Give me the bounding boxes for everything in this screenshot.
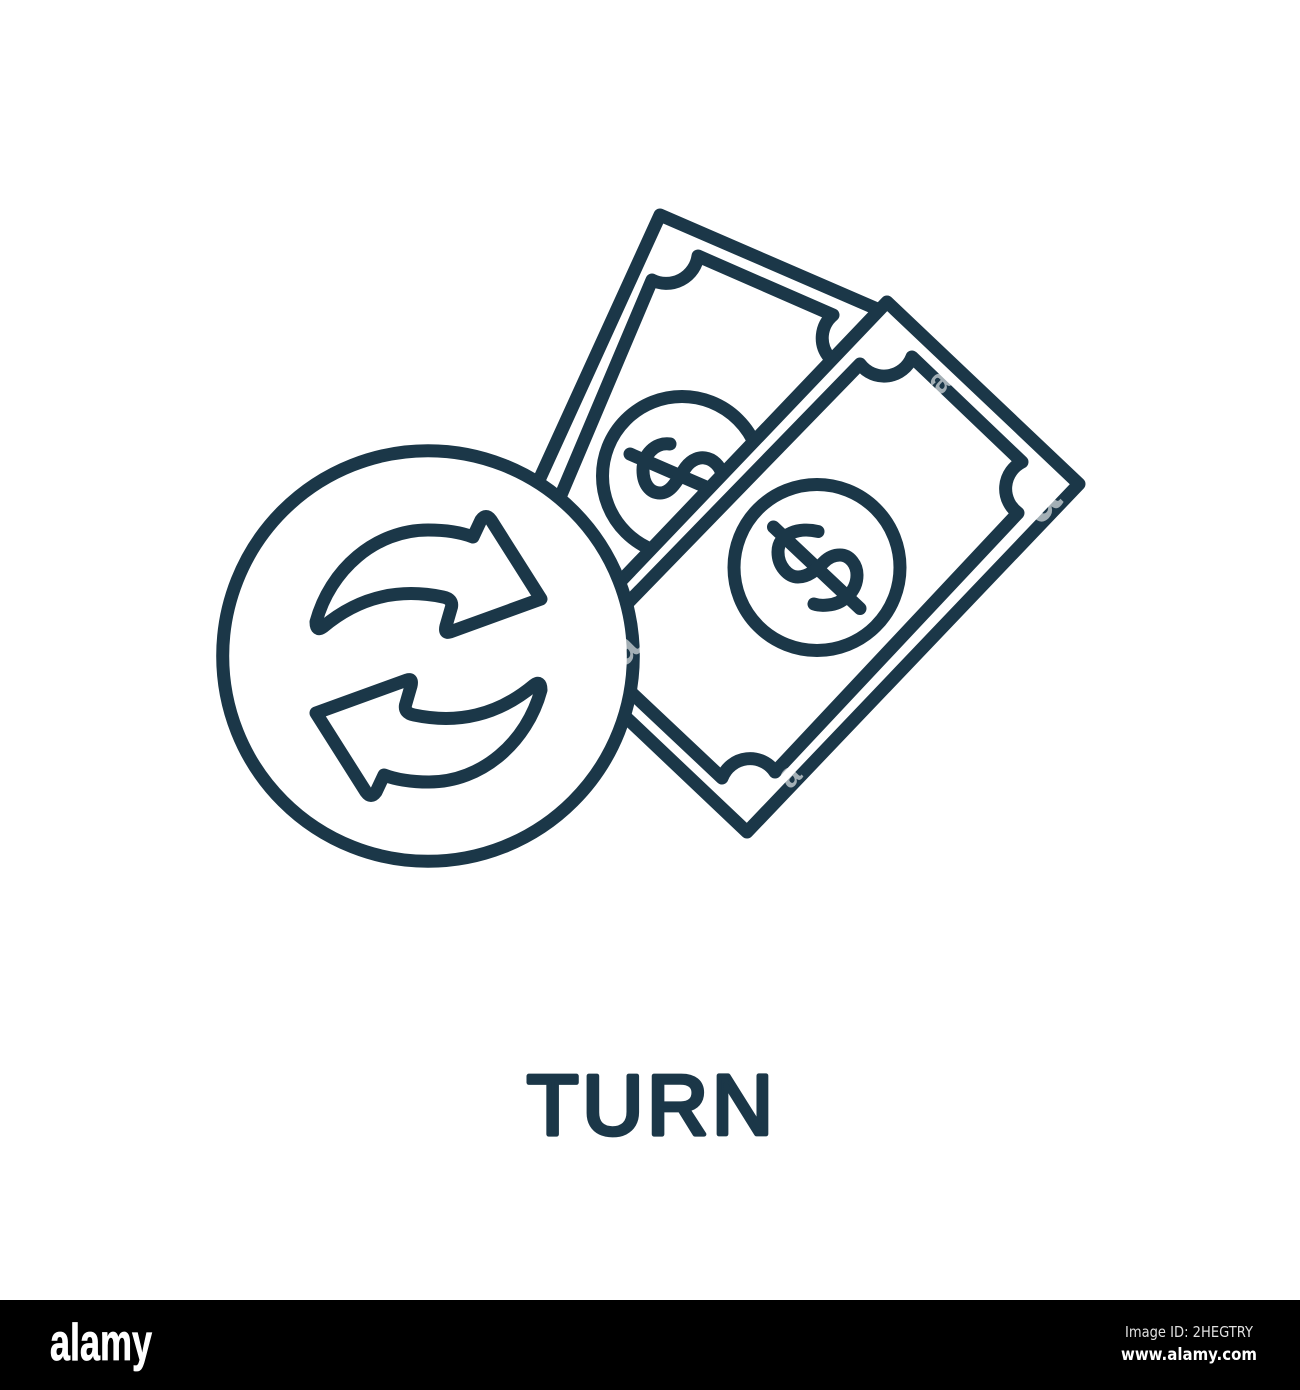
icon: back banknote [540,215,884,556]
watermark fragments: a [769,755,810,796]
logo: alamy: alamy [50,1314,152,1372]
icon: upper arrow [316,516,541,632]
watermark fragments [594,361,1073,796]
footer bar [0,1300,1300,1390]
icon: lower arrow [316,680,541,796]
icon: turn of money [223,215,1079,861]
image id: Image ID: 2HEGTRY [1125,1323,1254,1341]
watermark fragments: a [594,620,649,675]
icon: circle with exchange arrows [223,451,633,861]
watermark fragments: a [919,361,960,402]
icon: front banknote [555,302,1079,832]
title: TURN [527,1058,777,1152]
watermark fragments: a [1002,464,1073,535]
website: www.alamy.com [1121,1345,1257,1365]
